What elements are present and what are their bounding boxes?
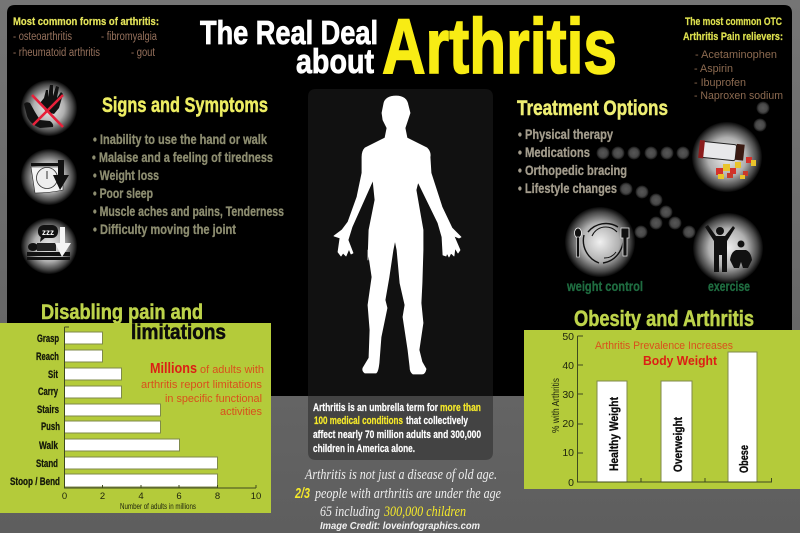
callout: millions of adults: of adults with xyxy=(200,364,264,376)
label: weight control: weight control xyxy=(566,279,643,294)
signs and symptoms heading: Signs and Symptoms xyxy=(102,94,268,117)
bottom note: 300,000 children xyxy=(383,504,466,520)
treatment list: • Orthopedic bracing xyxy=(518,163,627,178)
category labels: Reach xyxy=(36,351,59,363)
forms of arthritis list: Most common forms of arthritis: xyxy=(13,16,159,28)
label: exercise: exercise xyxy=(708,279,750,294)
y axis numbers: 30 xyxy=(562,389,574,401)
y axis title: % with Arthritis xyxy=(551,378,562,433)
bar labels: Obese xyxy=(737,445,751,473)
bottom note: people with arthritis are under the age xyxy=(314,486,501,502)
forms of arthritis list: - fibromyalgia xyxy=(101,31,157,43)
axis numbers: 10 xyxy=(251,491,261,502)
black main panel xyxy=(7,5,792,396)
chart subcaption: Body Weight xyxy=(643,353,718,368)
y axis numbers: 10 xyxy=(562,447,574,459)
callout: millions of adults: arthritis report limitations xyxy=(141,379,262,391)
bottom note xyxy=(294,467,501,520)
center description box: affect nearly 70 million adults and 300,000 xyxy=(313,429,481,441)
axis numbers: 4 xyxy=(138,491,144,502)
OTC pain relievers list: - Ibuprofen xyxy=(694,77,746,89)
symptoms list: • Muscle aches and pains, Tenderness xyxy=(93,204,284,219)
bars xyxy=(597,352,757,482)
center description box: 100 medical conditions xyxy=(314,415,403,427)
panel: obesity bar chart xyxy=(524,330,800,489)
icon: hand and foot crossed out xyxy=(21,80,77,136)
category labels: Stand xyxy=(36,458,58,470)
symptoms list: • Poor sleep xyxy=(93,186,153,201)
treatment list: • Physical therapy xyxy=(518,127,613,142)
bar labels: Healthy Weight xyxy=(607,397,621,471)
forms of arthritis list: - rheumatoid arthritis xyxy=(13,47,100,59)
treatment options heading: Treatment Options xyxy=(517,97,668,120)
category labels: Sit xyxy=(48,369,58,381)
title: Arthritis xyxy=(382,2,617,90)
center description box: Arthritis is an umbrella term for xyxy=(313,402,439,414)
bars xyxy=(64,332,218,487)
icon: exercise figures xyxy=(693,213,763,283)
symptoms list xyxy=(92,132,284,237)
bar labels: Overweight xyxy=(671,417,685,472)
forms of arthritis list: - osteoarthritis xyxy=(13,31,72,43)
axis numbers: 8 xyxy=(215,491,220,502)
icon: plate and cutlery xyxy=(565,207,635,277)
icon: sleep with down arrow: zzz xyxy=(42,228,54,237)
center description box: children in America alone. xyxy=(313,443,415,455)
axis numbers: 0 xyxy=(62,491,67,502)
heading: obesity and arthritis: Obesity and Arthritis xyxy=(574,306,754,331)
axis numbers: 2 xyxy=(100,491,105,502)
bottom note: 2/3 xyxy=(294,486,310,502)
heading: disabling pain, first line: Disabling pain and xyxy=(41,301,203,324)
bottom note: Arthritis is not just a disease of old age. xyxy=(304,467,497,483)
treatment list xyxy=(518,127,627,196)
y axis numbers: 40 xyxy=(562,360,574,372)
center description box: that collectively xyxy=(406,415,469,427)
symptoms list: • Weight loss xyxy=(93,168,159,183)
axis title: Number of adults in millions xyxy=(120,501,196,511)
heading: disabling pain, second line: limitations xyxy=(131,321,226,344)
treatment list: • Lifestyle changes xyxy=(518,181,617,196)
chart caption: Arthritis Prevalence Increases xyxy=(595,340,733,352)
callout: millions of adults: in specific functional xyxy=(165,393,262,405)
treatment list: • Medications xyxy=(518,145,590,160)
symptoms list: • Difficulty moving the joint xyxy=(93,222,236,237)
category labels: Stoop / Bend xyxy=(10,476,60,488)
center panel with body figure xyxy=(308,89,493,396)
OTC pain relievers list xyxy=(683,16,783,102)
axis numbers xyxy=(62,491,261,502)
y axis numbers xyxy=(562,331,574,489)
icon: sleep with down arrow xyxy=(21,218,77,274)
white human body silhouette xyxy=(334,96,461,374)
category labels: Grasp xyxy=(37,333,59,345)
category labels xyxy=(10,333,60,488)
center description box xyxy=(308,396,493,460)
axes xyxy=(578,336,772,482)
forms of arthritis list: - gout xyxy=(131,47,156,59)
icon: pill bottle and pills xyxy=(692,122,762,192)
forms of arthritis list xyxy=(13,16,159,59)
axes xyxy=(64,327,256,488)
OTC pain relievers list: - Naproxen sodium xyxy=(694,90,783,102)
callout: millions of adults xyxy=(141,360,264,418)
symptoms list: • Inability to use the hand or walk xyxy=(93,132,267,147)
category labels: Walk xyxy=(39,440,59,452)
OTC pain relievers list: - Acetaminophen xyxy=(695,49,777,61)
center description box: more than xyxy=(440,402,481,414)
y axis numbers: 0 xyxy=(568,477,574,489)
symptoms list: • Malaise and a feeling of tiredness xyxy=(92,150,273,165)
axis numbers: 6 xyxy=(176,491,182,502)
category labels: Push xyxy=(41,421,60,433)
bar labels xyxy=(607,397,751,473)
OTC pain relievers list: - Aspirin xyxy=(694,63,733,75)
panel: limitations bar chart xyxy=(0,321,271,513)
title: The Real Deal xyxy=(200,14,378,51)
category labels: Carry xyxy=(38,386,59,398)
icon: scale with down arrow xyxy=(21,149,77,205)
y axis numbers: 50 xyxy=(562,331,574,343)
bottom note: 65 including xyxy=(320,504,380,520)
connector dots xyxy=(596,102,770,238)
title xyxy=(200,2,617,90)
y axis numbers: 20 xyxy=(562,418,574,430)
title: about xyxy=(296,43,374,81)
category labels: Stairs xyxy=(37,404,59,416)
callout: millions of adults: Millions xyxy=(150,360,197,377)
image credit: Image Credit: loveinfographics.com xyxy=(320,520,480,532)
callout: millions of adults: activities xyxy=(220,406,262,418)
